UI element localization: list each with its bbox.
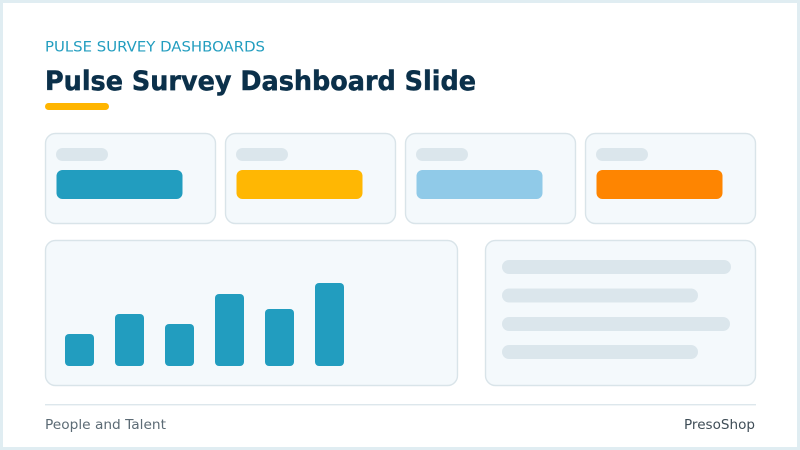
panel: KPI card 3: [406, 134, 576, 224]
panel: KPI card 2: [226, 134, 396, 224]
label placeholder 3: [416, 148, 468, 161]
panel: bar chart: [46, 240, 458, 386]
value bar 4: [596, 170, 722, 199]
placeholder lines: [502, 260, 731, 359]
label placeholder 2: [236, 148, 288, 161]
value bar 1: [56, 170, 182, 199]
panel: text placeholder lines: [486, 240, 756, 386]
eyebrow heading: PULSE SURVEY DASHBOARDS: [45, 40, 265, 56]
title: Pulse Survey Dashboard Slide: [45, 66, 476, 97]
title accent underline: [45, 103, 109, 110]
value bar 2: [236, 170, 362, 199]
footer rule: [45, 404, 756, 405]
footer right text: PresoShop: [684, 418, 755, 433]
bar chart: [65, 283, 344, 366]
panel: KPI card 4: [586, 134, 756, 224]
label placeholder 1: [56, 148, 108, 161]
value bar 3: [416, 170, 542, 199]
panel: KPI card 1: [46, 134, 216, 224]
label placeholder 4: [596, 148, 648, 161]
footer left text: People and Talent: [45, 418, 166, 433]
